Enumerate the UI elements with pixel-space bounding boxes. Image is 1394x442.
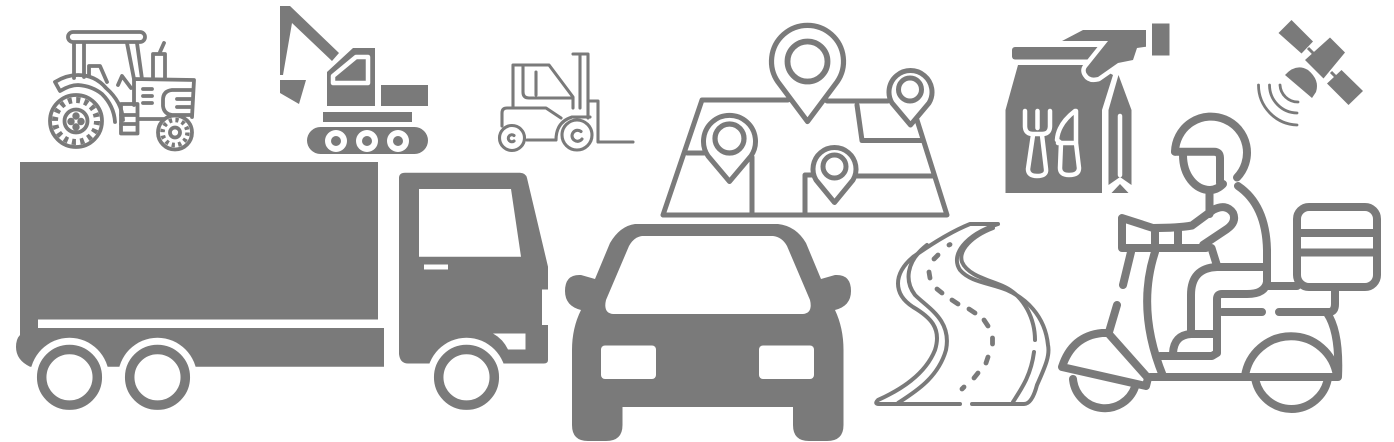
windshield [605, 236, 811, 314]
headlights [601, 346, 656, 379]
icon: delivery truck [16, 162, 548, 417]
icon: satellite [1258, 20, 1363, 125]
pin: left [704, 115, 756, 182]
icon: excavator [280, 6, 428, 154]
front fender [1062, 333, 1148, 386]
icon: food delivery bag with hand [1006, 24, 1170, 193]
icon: forklift [500, 54, 633, 150]
rear fender and wheel [1245, 336, 1337, 409]
rider body and arm [1153, 186, 1267, 356]
delivery box [1297, 207, 1377, 287]
scooter frame [1147, 252, 1163, 376]
handlebar [1122, 218, 1206, 248]
icon: map with location pins [663, 25, 947, 215]
icon: winding road [876, 224, 1049, 404]
pin: large top [772, 25, 844, 122]
icon: tractor [50, 32, 194, 150]
pin: right [889, 71, 932, 125]
pin: bottom [813, 148, 856, 202]
cargo box [16, 162, 384, 367]
fork and knife cutout [1025, 111, 1079, 176]
front wheel [1073, 379, 1135, 408]
map outline [663, 100, 947, 215]
wheels [30, 334, 526, 417]
rider helmet and head [1175, 117, 1247, 190]
icon: car front view [565, 224, 851, 441]
cab [399, 173, 548, 364]
icon: delivery scooter with rider [1062, 117, 1377, 409]
